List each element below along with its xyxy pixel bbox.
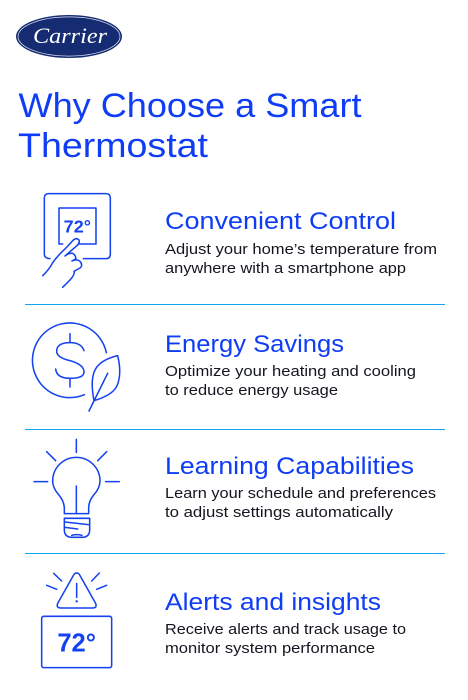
section: energy savings: Energy Savings	[165, 331, 344, 358]
section: learning capabilities: Learning Capabilities	[165, 453, 414, 480]
icon: light bulb	[34, 439, 119, 537]
section: learning capabilities	[165, 453, 436, 521]
title: Thermostat	[18, 127, 209, 165]
section: energy savings	[165, 331, 416, 399]
logo: Carrier: Carrier	[33, 23, 107, 48]
icon: alert triangle over thermostat: 72°	[57, 628, 96, 658]
section: alerts and insights	[165, 589, 406, 657]
section: alerts and insights: Receive alerts and track usage to	[165, 621, 406, 638]
icon: thermostat with hand	[43, 194, 110, 287]
logo: Carrier	[16, 15, 122, 58]
section: learning capabilities: Learn your schedule and preferences	[165, 485, 436, 502]
title	[18, 87, 362, 165]
section: alerts and insights: Alerts and insights	[165, 589, 381, 616]
icon: thermostat with hand: 72°	[64, 217, 91, 237]
section: learning capabilities: to adjust settings automatically	[165, 504, 394, 521]
section: convenient control: Convenient Control	[165, 208, 396, 235]
icon: alert triangle over thermostat	[42, 573, 112, 668]
section: convenient control: Adjust your home’s temperature from	[165, 241, 437, 258]
section: convenient control	[165, 208, 437, 277]
section: energy savings: Optimize your heating and cooling	[165, 363, 416, 380]
section: energy savings: to reduce energy usage	[165, 382, 338, 399]
title: Why Choose a Smart	[18, 87, 362, 125]
section: convenient control: anywhere with a smartphone app	[165, 260, 406, 277]
icon: dollar coin with leaf	[32, 323, 120, 411]
section: alerts and insights: monitor system performance	[165, 640, 375, 657]
